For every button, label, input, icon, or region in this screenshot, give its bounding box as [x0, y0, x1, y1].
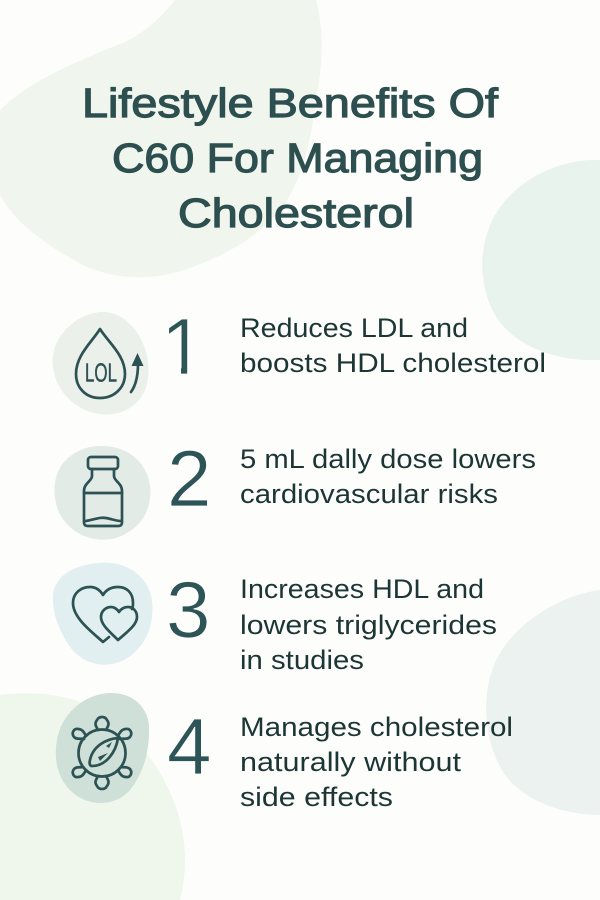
background blob: top left — [0, 0, 322, 277]
text: benefit 4: naturally without — [240, 747, 462, 777]
number 3: 3 — [166, 565, 210, 654]
icon: bottle — [54, 446, 150, 540]
number 2: 2 — [167, 434, 212, 523]
background blob: top right — [482, 160, 600, 360]
text: benefit 4: Manages cholesterol — [240, 712, 513, 742]
text: benefit 3 — [240, 574, 497, 675]
number 1: 1 — [161, 302, 206, 391]
background blob: bottom left — [0, 693, 185, 900]
benefit 4 — [56, 693, 513, 812]
benefit 3 — [53, 563, 497, 675]
text: benefit 3: Increases HDL and — [240, 574, 484, 604]
title: Cholesterol — [178, 190, 414, 236]
text: benefit 3: in studies — [240, 645, 364, 675]
text: benefit 3: lowers triglycerides — [240, 610, 497, 640]
text: benefit 2: 5 mL dally dose lowers — [240, 444, 536, 474]
text: benefit 4: side effects — [240, 782, 393, 812]
title: Lifestyle Benefits Of — [82, 80, 499, 126]
benefit 1 — [53, 302, 546, 415]
text: benefit 1: boosts HDL cholesterol — [240, 348, 546, 378]
background blob: bottom right — [486, 590, 600, 815]
text: benefit 1: Reduces LDL and — [240, 313, 468, 343]
text: benefit 2 — [240, 444, 536, 509]
icon: compass leaf — [56, 693, 149, 803]
benefit 2 — [54, 434, 536, 540]
icon: two hearts — [53, 563, 153, 665]
text: benefit 4 — [240, 712, 513, 812]
icon: LDL droplet with up arrow — [53, 312, 149, 415]
text: benefit 1 — [240, 313, 546, 378]
text: benefit 2: cardiovascular risks — [240, 479, 498, 509]
title: C60 For Managing — [112, 135, 483, 181]
icon: LDL droplet with up arrow: LOL — [85, 358, 117, 388]
number 4: 4 — [167, 702, 212, 791]
title — [82, 80, 499, 236]
